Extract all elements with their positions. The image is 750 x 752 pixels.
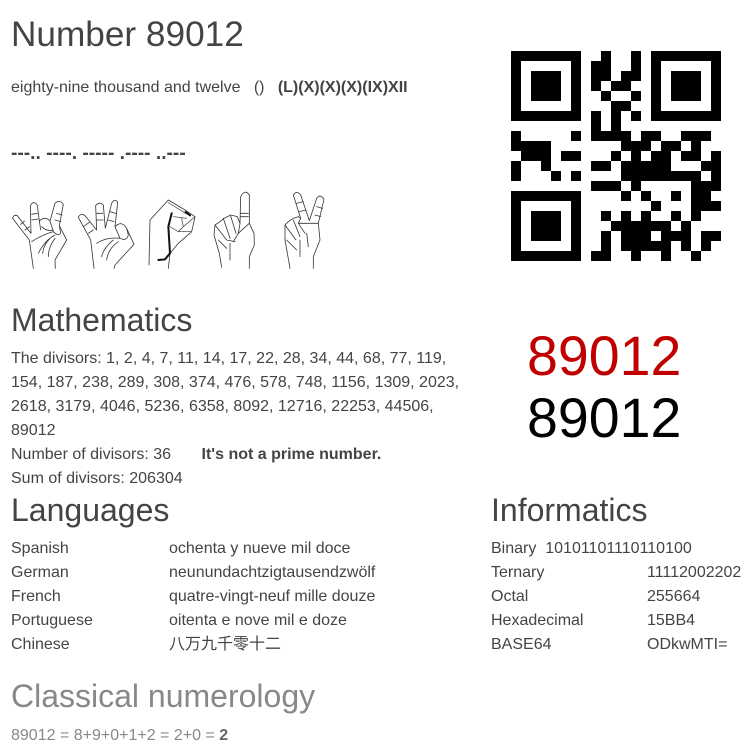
row: Octal: 255664 (647, 588, 700, 605)
row: Spanish: Spanish (11, 540, 69, 557)
row: BASE64: ODkwMTI= (647, 636, 727, 653)
QR code (511, 51, 721, 261)
numerology sum: 89012 = 8+9+0+1+2 = 2+0 = 2 (11, 727, 228, 744)
heading: Mathematics: Mathematics (11, 302, 192, 338)
heading: Classical numerology: Classical numerology (11, 678, 315, 714)
row: French (11, 588, 375, 605)
row: Chinese (11, 635, 281, 653)
QR finder patterns (511, 51, 721, 261)
divisors text: Sum of divisors: 206304 (11, 470, 183, 487)
icon: hand digit 2 (285, 192, 324, 268)
icon: hand digit 9 (78, 200, 134, 268)
row: Spanish: ochenta y nueve mil doce (169, 540, 350, 557)
row: Chinese: 八万九千零十二 (169, 636, 281, 653)
row: Portuguese: Portuguese (11, 612, 93, 629)
row: Ternary (491, 564, 741, 581)
row: German: German (11, 564, 69, 581)
row: Ternary: 11112002202 (647, 564, 741, 581)
row: Octal: Octal (491, 588, 528, 605)
row: Hexadecimal: 15BB4 (647, 612, 695, 629)
number image red: 89012 (527, 325, 681, 387)
row: French: French (11, 588, 61, 605)
morse code: ---.. ----. ----- .---- ..--- (11, 143, 186, 164)
QR data modules (511, 51, 721, 261)
row: Binary: Binary 10101101110110100 (491, 540, 692, 557)
divisors text: 2618, 3179, 4046, 5236, 6358, 8092, 12716, 22253, 44506, (11, 398, 434, 415)
row: Hexadecimal: Hexadecimal (491, 612, 583, 629)
icon: hand digit 1 (214, 192, 254, 268)
number image black: 89012 (527, 387, 681, 449)
divisors text: 89012 (11, 422, 56, 439)
row: BASE64 (491, 636, 727, 653)
row: Ternary: Ternary (491, 564, 544, 581)
sign language hands (12, 192, 324, 269)
languages table (11, 540, 376, 653)
row: Chinese: Chinese (11, 636, 70, 653)
divisors text (11, 350, 459, 487)
informatics table (491, 540, 741, 653)
divisors text: The divisors: 1, 2, 4, 7, 11, 14, 17, 22, 28, 34, 44, 68, 77, 119, (11, 350, 446, 367)
row: Portuguese: oitenta e nove mil e doze (169, 612, 347, 629)
row: French: quatre-vingt-neuf mille douze (169, 588, 375, 605)
row: BASE64: BASE64 (491, 636, 551, 653)
number in words and Roman numerals: eighty-nine thousand and twelve () (L)(X)(X)(X)(IX)XII (11, 79, 408, 96)
icon: hand digit 0 (149, 200, 195, 268)
row: Hexadecimal (491, 612, 695, 629)
row: German: neunundachtzigtausendzwölf (169, 564, 375, 581)
row: Octal (491, 588, 700, 605)
heading: Informatics: Informatics (491, 492, 647, 528)
row: Portuguese (11, 612, 347, 629)
icon: hand digit 8 (13, 201, 67, 268)
divisors text: 154, 187, 238, 289, 308, 374, 476, 578, 748, 1156, 1309, 2023, (11, 374, 459, 391)
divisors text: Number of divisors: 36 It's not a prime number. (11, 446, 381, 463)
row: German (11, 564, 376, 581)
row: Spanish (11, 540, 350, 557)
heading: Languages: Languages (11, 492, 169, 528)
title: Number 89012 (11, 15, 244, 54)
